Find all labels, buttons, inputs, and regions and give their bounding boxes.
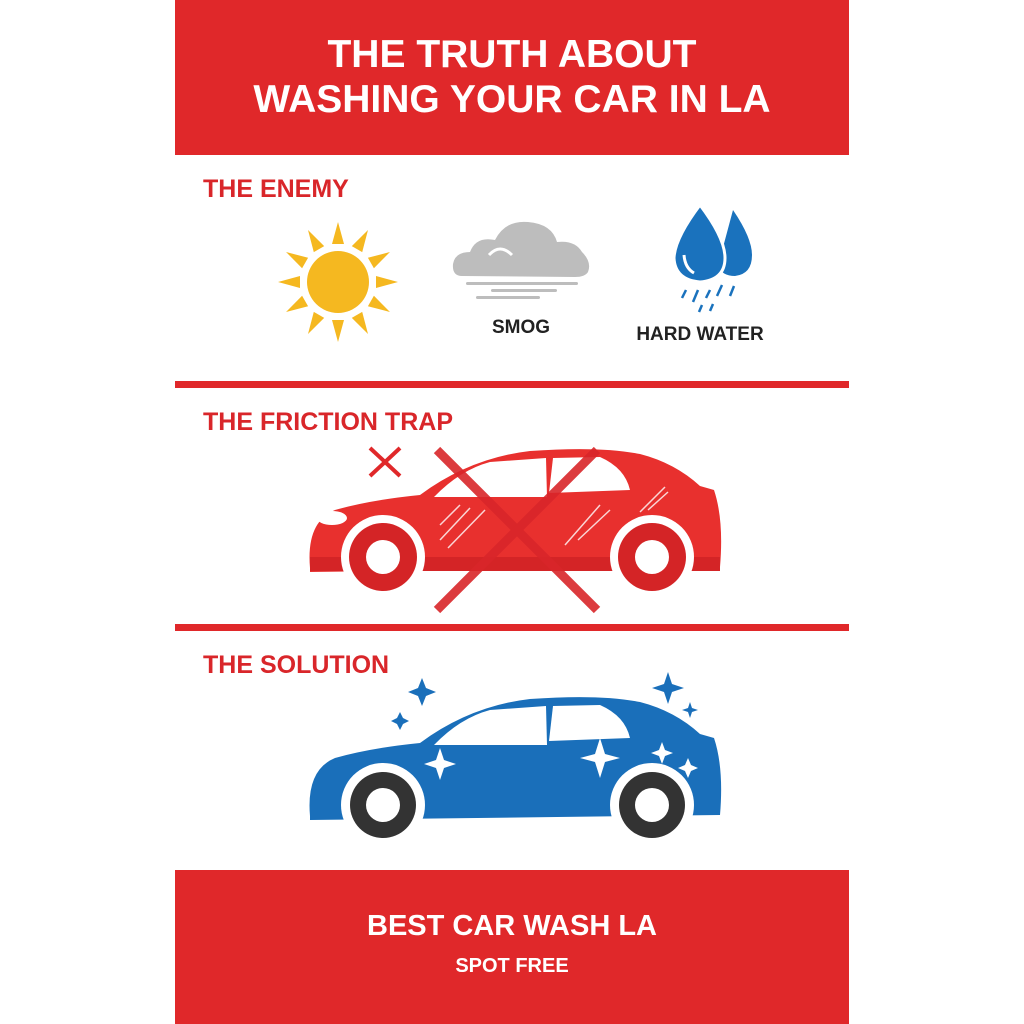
footer band: SPOT FREE xyxy=(455,955,569,977)
label: hard water: HARD WATER xyxy=(636,324,764,345)
heading: solution: THE SOLUTION xyxy=(203,651,389,679)
sparkles xyxy=(391,672,698,730)
footer band xyxy=(175,870,849,1024)
icon: sun xyxy=(278,222,398,342)
title: WASHING YOUR CAR IN LA xyxy=(253,78,771,121)
icon: small x xyxy=(370,448,400,476)
heading: the enemy: THE ENEMY xyxy=(203,175,349,203)
header band xyxy=(175,0,849,155)
icon: water drops xyxy=(674,205,752,312)
heading: friction trap: THE FRICTION TRAP xyxy=(203,408,453,436)
red car xyxy=(310,449,721,599)
title: THE TRUTH ABOUT xyxy=(327,33,696,76)
title xyxy=(253,33,771,121)
footer text: BEST CAR WASH LA xyxy=(367,910,657,942)
label: smog: SMOG xyxy=(492,317,550,338)
icon: smog cloud xyxy=(453,222,589,299)
big x xyxy=(437,450,597,610)
